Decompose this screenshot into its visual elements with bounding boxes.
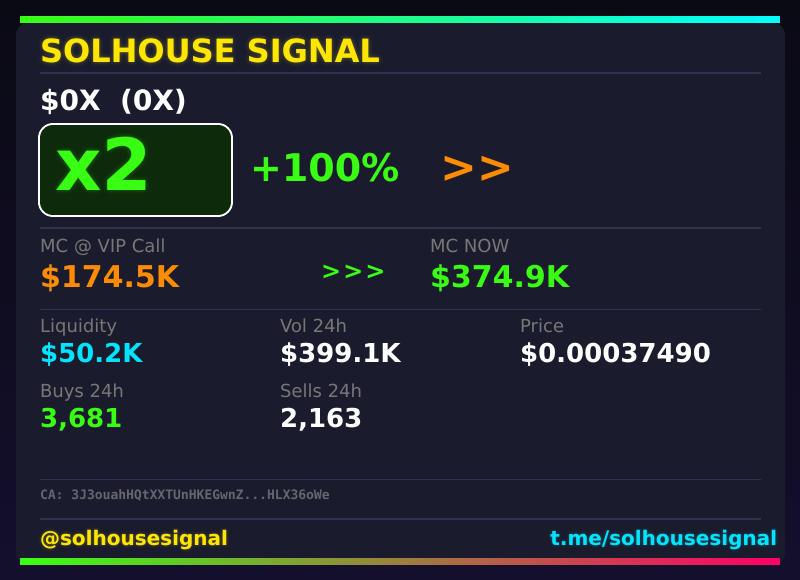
- value: $374.9K: [430, 260, 569, 295]
- stat: price: [520, 316, 711, 369]
- green arrows: >>>: [321, 257, 387, 285]
- bottom gradient bar: [20, 558, 780, 565]
- stat: buys: Buys 24h: [40, 381, 124, 402]
- stat: sells: Sells 24h: [280, 381, 362, 402]
- top gradient bar: [20, 16, 780, 23]
- value: $174.5K: [40, 260, 179, 295]
- stat: price: $0.00037490: [520, 339, 711, 369]
- label: MC @ VIP Call: [40, 236, 165, 257]
- title: SOLHOUSE SIGNAL: [40, 32, 380, 70]
- label: MC NOW: [430, 236, 509, 257]
- MC now: [430, 236, 570, 295]
- stat: buys: 3,681: [40, 404, 122, 434]
- stat: liquidity: [40, 316, 144, 369]
- multiplier text: x2: [55, 123, 152, 207]
- stat: volume: $399.1K: [280, 339, 400, 369]
- stat: price: Price: [520, 316, 564, 337]
- orange arrows: >>: [440, 142, 514, 193]
- stat: volume: [280, 316, 402, 369]
- MC at VIP call: [40, 236, 180, 295]
- footer link: t.me/solhousesignal: [550, 526, 777, 550]
- stat: buys: [40, 381, 124, 434]
- stat: sells: 2,163: [280, 404, 362, 434]
- stat: liquidity: Liquidity: [40, 316, 117, 337]
- contract address: CA: 3J3ouahHQtXXTUnHKEGwnZ...HLX36oWe: [40, 488, 330, 503]
- ticker: $0X (0X): [40, 84, 187, 117]
- stat: liquidity: $50.2K: [40, 339, 142, 369]
- multiplier badge: [38, 123, 233, 217]
- badge frame: [38, 123, 233, 217]
- stat: volume: Vol 24h: [280, 316, 347, 337]
- percent gain: +100%: [250, 146, 399, 190]
- stat: sells: [280, 381, 362, 434]
- footer handle: @solhousesignal: [40, 526, 228, 550]
